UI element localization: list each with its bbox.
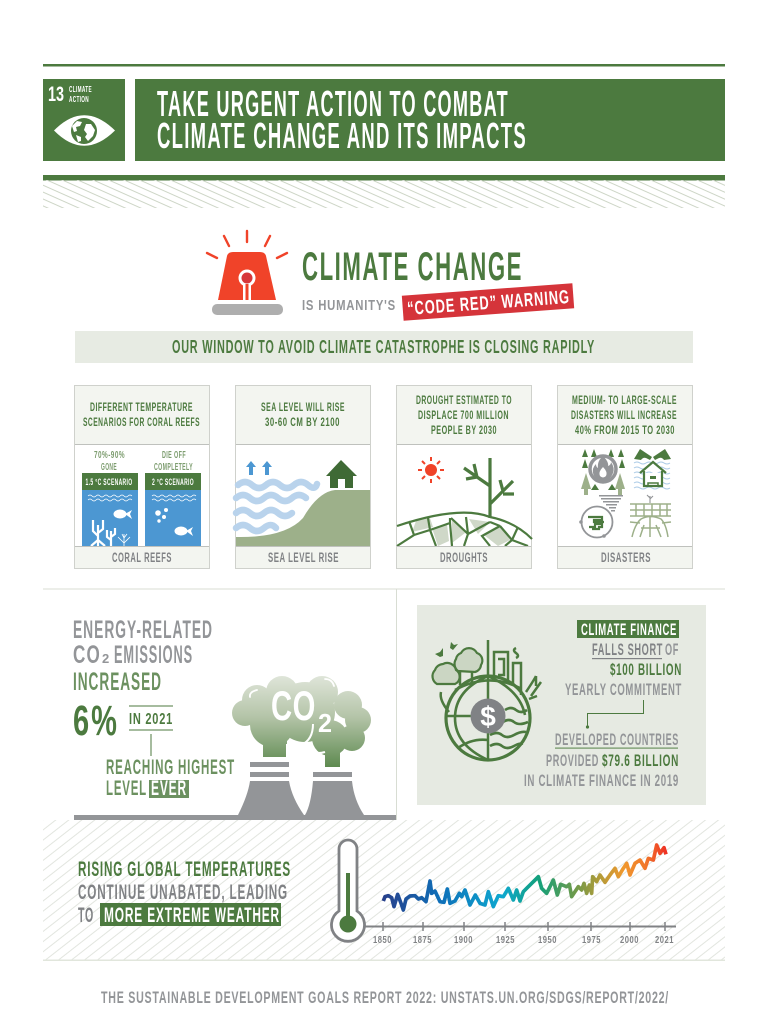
icon: eye with globe — [54, 115, 115, 146]
icon: globe with dollar: $ — [480, 701, 496, 732]
CO2 text block: CO — [73, 641, 101, 669]
illustration: power plant with CO2 cloud: CO — [271, 682, 316, 729]
waves — [236, 482, 317, 531]
icon: sun — [418, 457, 444, 483]
panel: climate finance: $100 BILLION — [610, 661, 682, 679]
panel: climate finance — [417, 605, 706, 805]
chart: global temperature line — [365, 845, 676, 946]
CO2 text block — [73, 616, 235, 800]
panel: disasters: DISASTERS WILL INCREASE — [571, 410, 677, 422]
chart: global temperature line: 1900 — [454, 934, 473, 946]
text: rising temperatures: CONTINUE UNABATED, LEADING — [78, 881, 288, 904]
panel: droughts: DROUGHT ESTIMATED TO — [416, 395, 512, 407]
icon: wildfire — [581, 449, 625, 495]
CO2 text block: ENERGY-RELATED — [73, 616, 213, 644]
1.5 degree scenario: 1.5 °C SCENARIO — [86, 477, 132, 488]
land — [236, 490, 370, 546]
panel: coral reefs — [74, 386, 210, 568]
panel: climate finance: FALLS SHORT — [592, 641, 663, 659]
chart: global temperature line: 1850 — [373, 934, 392, 946]
heading: climate change: CLIMATE CHANGE — [302, 245, 523, 289]
panel: sea level rise: SEA LEVEL WILL RISE — [261, 402, 345, 414]
cracked ground — [397, 513, 532, 546]
text: rising temperatures — [78, 858, 291, 927]
CO2 text block: REACHING HIGHEST — [106, 756, 235, 779]
SDG 13 badge: CLIMATE — [69, 85, 92, 94]
chart: global temperature line: 2021 — [655, 934, 674, 946]
1.5 degree scenario — [82, 473, 138, 546]
panel: droughts: DISPLACE 700 MILLION — [418, 410, 509, 422]
connector arrow — [586, 700, 644, 729]
SDG 13 badge: ACTION — [69, 95, 89, 104]
panel: coral reefs: DIE OFF — [162, 450, 186, 461]
chart: global temperature line: 1975 — [582, 934, 601, 946]
panel: disasters — [558, 386, 692, 568]
icon: up arrows — [246, 461, 272, 475]
panel: coral reefs: GONE — [101, 462, 117, 473]
icon: tornado and storm — [579, 495, 623, 538]
panel: coral reefs: SCENARIOS FOR CORAL REEFS — [83, 417, 200, 429]
icon: house — [326, 460, 357, 488]
2 degree scenario — [145, 473, 201, 546]
icon: dry cracked land — [630, 495, 671, 537]
CO2 text block: 6% — [73, 697, 119, 745]
illustration: power plant with CO2 cloud: 2 — [318, 708, 332, 738]
text: rising temperatures: TO — [78, 904, 94, 927]
chart: global temperature line: 1925 — [496, 934, 515, 946]
subheading: IS HUMANITY'S — [302, 297, 396, 314]
panel: droughts: DROUGHTS — [440, 550, 488, 565]
chart: global temperature line: 1875 — [413, 934, 432, 946]
icon: globe with dollar — [433, 640, 541, 760]
panel: droughts — [396, 386, 532, 568]
panel: climate finance: $79.6 BILLION — [602, 752, 679, 770]
SDG 13 badge: 13 — [48, 83, 64, 106]
icon: thermometer — [332, 840, 364, 941]
CO2 text block: 2 — [102, 651, 110, 666]
panel: sea level rise — [236, 386, 370, 568]
CO2 text block: EMISSIONS — [114, 641, 193, 669]
banner: closing window — [75, 331, 693, 363]
panel: climate finance: CLIMATE FINANCE — [581, 620, 677, 639]
2 degree scenario: 2 °C SCENARIO — [152, 477, 194, 488]
chart: global temperature line: 2000 — [620, 934, 639, 946]
ground line — [74, 815, 396, 820]
code red tag: “CODE RED” WARNING — [407, 287, 571, 320]
panel: coral reefs: COMPLETELY — [154, 462, 193, 473]
SDG 13 badge — [43, 79, 125, 161]
CO2 text block: EVER — [151, 777, 187, 800]
panel: climate finance: YEARLY COMMITMENT — [565, 681, 682, 699]
CO2 text block: IN 2021 — [129, 711, 173, 728]
CO2 text block: INCREASED — [73, 668, 162, 696]
illustration: power plant with CO2 cloud — [232, 676, 371, 815]
panel: disasters: 40% FROM 2015 TO 2030 — [575, 425, 675, 437]
icon: flood — [634, 449, 671, 489]
CO2 text block: LEVEL — [106, 777, 147, 800]
panel: sea level rise: 30-60 CM BY 2100 — [265, 417, 340, 429]
chart: global temperature line: 1950 — [538, 934, 557, 946]
icon: red siren — [207, 231, 287, 315]
panel: climate finance: PROVIDED — [546, 752, 599, 770]
text: rising temperatures: RISING GLOBAL TEMPERATURES — [78, 858, 291, 881]
icon: bare tree — [464, 458, 514, 518]
panel: droughts: PEOPLE BY 2030 — [431, 425, 497, 437]
text: rising temperatures: MORE EXTREME WEATHER — [104, 904, 280, 927]
panel: coral reefs: 70%-90% — [94, 450, 125, 461]
title banner — [135, 79, 725, 161]
panel: disasters: DISASTERS — [601, 550, 651, 565]
panel: sea level rise: SEA LEVEL RISE — [268, 550, 339, 565]
panel: coral reefs: DIFFERENT TEMPERATURE — [90, 402, 193, 414]
panel: coral reefs: CORAL REEFS — [112, 550, 172, 565]
code red tag — [402, 283, 574, 321]
panel: disasters: MEDIUM- TO LARGE-SCALE — [572, 395, 677, 407]
panel: climate finance: OF — [665, 641, 679, 659]
